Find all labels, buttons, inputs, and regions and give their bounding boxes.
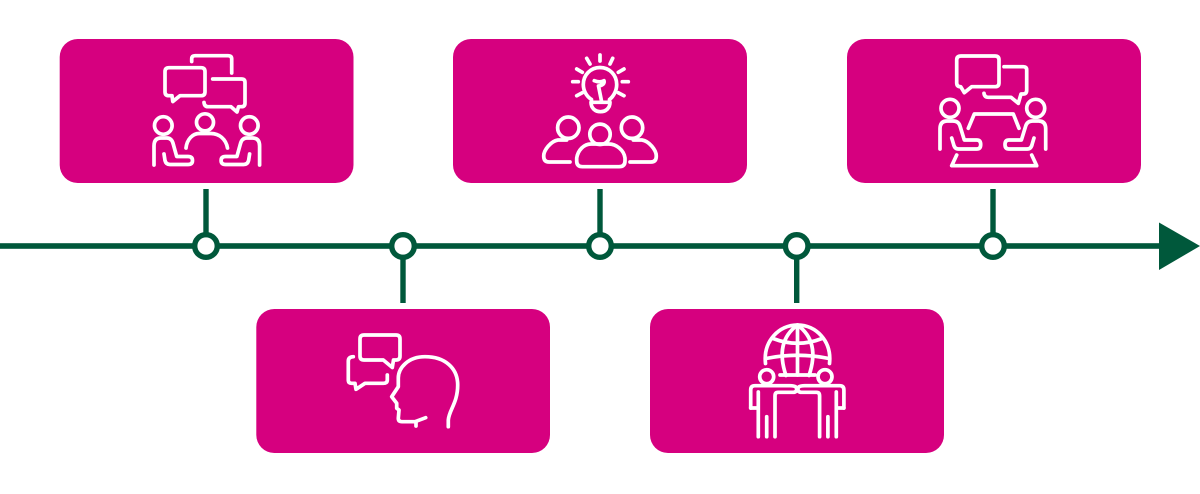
timeline nodes	[195, 235, 1004, 257]
panel: group discussion	[60, 39, 353, 183]
icon: two people shaking hands under a globe	[751, 325, 844, 437]
timeline axis with arrow	[0, 222, 1200, 270]
icon: three people with speech bubbles	[154, 56, 260, 165]
panel: individual reflection	[256, 309, 550, 453]
panel: team ideas	[453, 39, 747, 183]
panel: one-to-one meeting	[847, 39, 1141, 183]
icon: three people under a lightbulb	[544, 55, 656, 167]
connector stems	[203, 189, 996, 303]
panel: global collaboration	[650, 309, 944, 453]
icon: head with speech bubbles	[348, 335, 458, 427]
icon: two people at a table with speech bubbles	[940, 56, 1046, 166]
